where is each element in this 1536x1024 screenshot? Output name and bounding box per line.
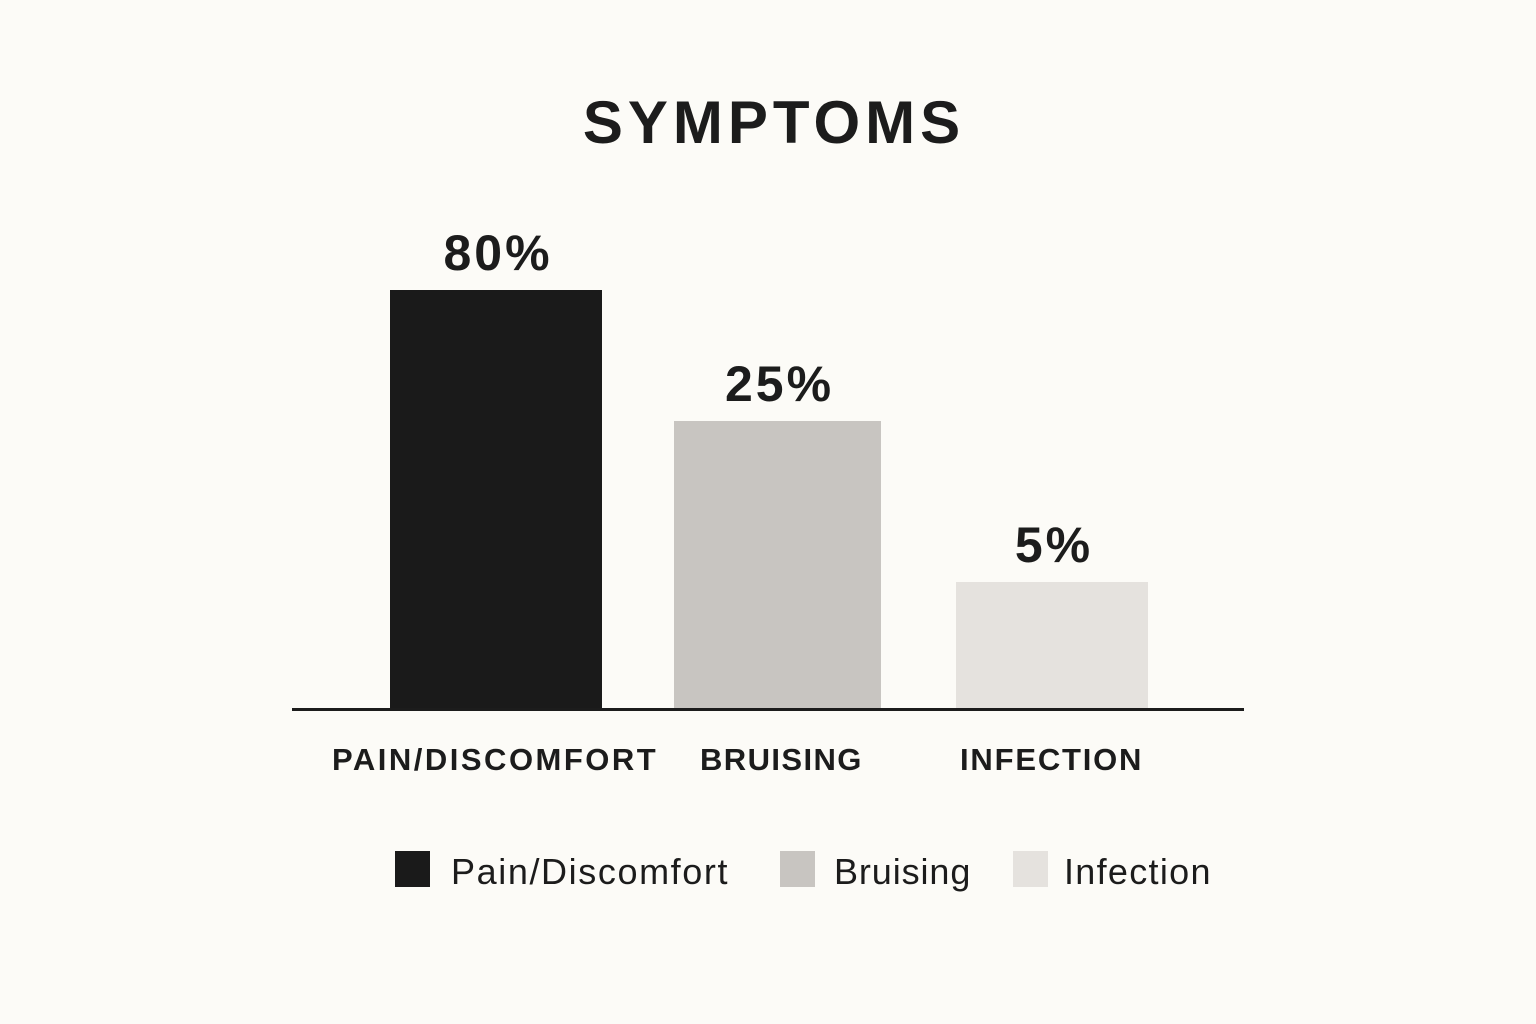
- bar chart: [292, 225, 1244, 777]
- legend: bruising: Bruising: [834, 851, 971, 892]
- title: SYMPTOMS: [583, 89, 965, 156]
- value: 25%: 25%: [725, 356, 834, 412]
- category labels: [332, 742, 1143, 777]
- category labels: BRUISING: [700, 742, 863, 777]
- legend: [395, 851, 1212, 892]
- legend: infection: Infection: [1064, 851, 1212, 892]
- value: 80%: 80%: [443, 225, 553, 281]
- legend: pain: Pain/Discomfort: [451, 851, 729, 892]
- category labels: INFECTION: [960, 742, 1143, 777]
- bar: pain/discomfort: [390, 290, 602, 710]
- bar: infection: [956, 582, 1148, 710]
- value: 5%: 5%: [1015, 517, 1093, 573]
- category labels: PAIN/DISCOMFORT: [332, 742, 658, 777]
- axis line: [292, 708, 1244, 711]
- bar: bruising: [674, 421, 881, 710]
